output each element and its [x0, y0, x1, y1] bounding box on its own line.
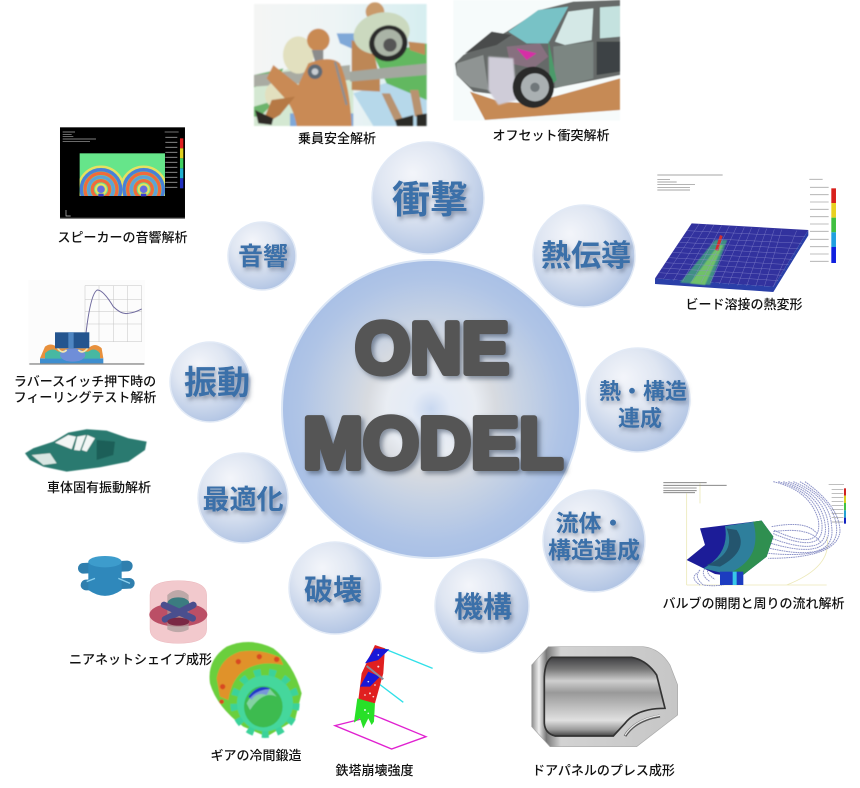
- label: 乗員安全解析: 乗員安全解析: [298, 131, 376, 146]
- panel: door panel press forming: [532, 647, 678, 778]
- image: blue forged part and pink die: [83, 556, 207, 643]
- image: acoustic field plot: [60, 127, 185, 219]
- image: force curve and rubber switch section: [28, 280, 145, 365]
- bubble: 最適化: 最適化: [202, 485, 284, 515]
- label: ラバースイッチ押下時の: ラバースイッチ押下時の: [14, 374, 156, 389]
- label: ニアネットシェイプ成形: ニアネットシェイプ成形: [69, 652, 212, 667]
- panel: near net shape forming: [69, 556, 212, 667]
- image: thermal contour plate: [655, 175, 836, 292]
- bubble: 流体・構造連成: 構造連成: [548, 537, 640, 563]
- bubble: 破壊: 破壊: [304, 574, 362, 607]
- label: バルブの開閉と周りの流れ解析: バルブの開閉と周りの流れ解析: [662, 596, 845, 611]
- bubble: 機構: 機構: [454, 591, 512, 624]
- bubble: 熱・構造連成: [586, 348, 690, 452]
- image: crash dummies with airbags: [254, 2, 427, 126]
- bubble: 最適化: [198, 453, 288, 543]
- bubble: 機構: [435, 559, 529, 653]
- panel: bead welding thermal deformation: [655, 175, 836, 312]
- bubble: 音響: [228, 222, 296, 290]
- title: ONE: ONE: [355, 309, 509, 389]
- label: ビード溶接の熱変形: ビード溶接の熱変形: [685, 297, 803, 312]
- bubble: 流体・構造連成: [543, 490, 645, 592]
- title: MODEL: MODEL: [303, 404, 563, 484]
- label: フィーリングテスト解析: フィーリングテスト解析: [14, 390, 156, 405]
- bubble: 破壊: [289, 542, 381, 634]
- panel: car body eigenvibration analysis: [25, 429, 151, 495]
- image: valve flow streamlines: [663, 482, 846, 586]
- bubble: 熱伝導: [533, 205, 635, 307]
- bubble: 振動: [170, 342, 250, 422]
- label: 鉄塔崩壊強度: 鉄塔崩壊強度: [335, 763, 414, 778]
- label: 車体固有振動解析: 車体固有振動解析: [47, 480, 151, 495]
- image: tower FE model: [335, 645, 433, 749]
- label: スピーカーの音響解析: スピーカーの音響解析: [57, 230, 188, 245]
- panel: gear cold forging: [210, 642, 302, 763]
- label: ドアパネルのプレス成形: ドアパネルのプレス成形: [532, 763, 675, 778]
- image: pressed door panel: [532, 647, 678, 747]
- panel: steel tower collapse strength: [335, 645, 433, 778]
- bubble: 流体・構造連成: 流体・: [556, 510, 624, 536]
- panel: speaker acoustic analysis: [57, 127, 188, 245]
- label: オフセット衝突解析: オフセット衝突解析: [492, 128, 610, 143]
- central circle: ONE MODEL: [282, 260, 580, 558]
- panel: offset crash analysis: [453, 0, 620, 143]
- bubble: 音響: 音響: [238, 243, 288, 271]
- bubble: 熱・構造連成: 熱・構造: [599, 379, 687, 404]
- panel: occupant safety analysis: [254, 2, 427, 146]
- bubble: 振動: 振動: [184, 364, 250, 401]
- bubble: 熱・構造連成: 連成: [618, 406, 662, 431]
- image: car body mesh: [25, 429, 147, 472]
- label: ギアの冷間鍛造: ギアの冷間鍛造: [210, 748, 302, 763]
- bubble: 衝撃: [372, 142, 484, 254]
- panel: valve open/close flow analysis: [662, 482, 846, 611]
- image: contoured gear: [210, 642, 302, 737]
- bubble: 熱伝導: 熱伝導: [541, 240, 631, 273]
- image: crashed car on barrier: [453, 0, 620, 121]
- bubble: 衝撃: 衝撃: [392, 180, 468, 222]
- panel: rubber switch feeling test analysis: [14, 280, 156, 405]
